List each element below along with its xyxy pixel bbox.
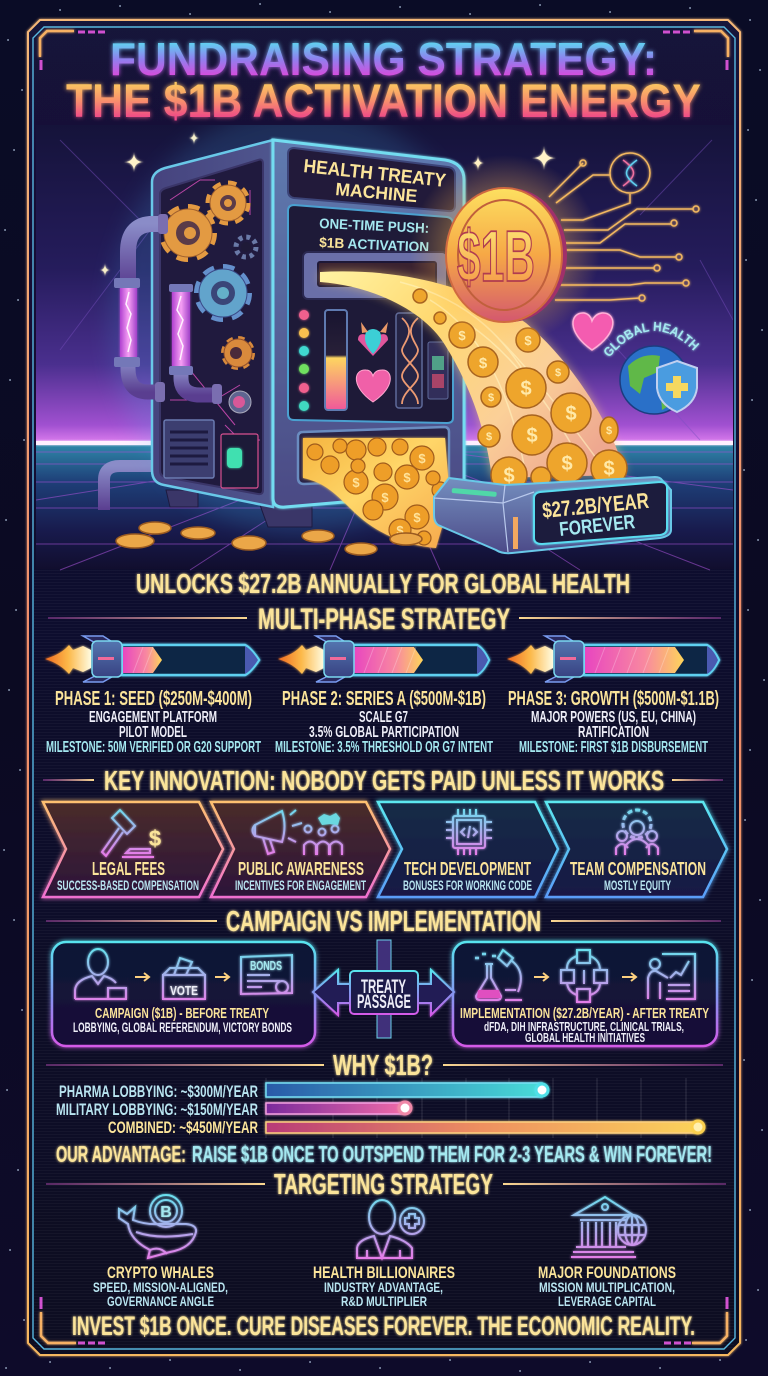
icon: network [561,950,607,1002]
slot [303,252,447,299]
big $1B coin: $1B [457,217,535,297]
phase 2 text: 3.5% GLOBAL PARTICIPATION [309,724,459,741]
title [66,33,701,127]
icon: institution with globe [571,1197,646,1257]
target: major foundations: LEVERAGE CAPITAL [558,1293,656,1309]
control panel [288,205,453,423]
phase 1 text: MILESTONE: 50M VERIFIED OR G20 SUPPORT [46,739,261,756]
header screen: MACHINE [335,179,418,206]
chevron: tech development: BONUSES FOR WORKING CODE [403,878,532,893]
coin dollar signs [458,328,615,487]
global health badge: GLOBAL HEALTH [602,320,701,358]
coin stream from slot [320,271,626,478]
phase 1 text: PHASE 1: SEED ($250M-$400M) [55,688,252,710]
target: major foundations: MAJOR FOUNDATIONS [538,1263,676,1282]
gear small blue [236,237,256,257]
icon: teal emblem [358,334,388,356]
small monitor [221,434,258,488]
section: multi-phase strategy [45,603,721,756]
panel: implementation [453,942,717,1046]
small meter panel [428,342,448,399]
icon: bonds certificate [241,955,292,994]
coin stream from chamber: $ [413,510,421,525]
arrow [215,973,229,981]
coin stream from chamber: $ [396,523,404,538]
lower scanline texture [34,570,734,1348]
collection bin [434,477,671,553]
target: crypto whales: SPEED, MISSION-ALIGNED, [93,1279,228,1295]
rocket 2 [278,636,489,682]
target: health billionaires: R&D MULTIPLIER [341,1293,427,1309]
phase 2 text [275,688,493,756]
phase 1 text: ENGAGEMENT PLATFORM [89,709,217,726]
sky background [36,125,733,444]
bar chart [56,1078,704,1138]
hero illustration [36,125,733,570]
chevron: tech development: TECH DEVELOPMENT [404,859,531,879]
machine [110,105,490,535]
bar: military: MILITARY LOBBYING: ~$150M/YEAR [56,1101,258,1119]
title: THE $1B ACTIVATION ENERGY [66,74,701,127]
status lights [299,310,309,411]
bar: combined [108,1119,704,1137]
icon: lab flask and microscope [475,950,522,1000]
phase 1 text [46,688,261,756]
gear big [163,208,213,258]
sparkles [100,131,556,277]
target: health billionaires: HEALTH BILLIONAIRES [313,1263,455,1282]
bin label: FOREVER [558,511,637,541]
icon: heart [356,370,390,402]
coin stream from chamber: $ [381,490,389,505]
coin dollar signs: $ [503,465,515,487]
circuit lines [549,153,699,301]
bar: combined: COMBINED: ~$450M/YEAR [108,1119,258,1137]
heading: CAMPAIGN VS IMPLEMENTATION [226,906,541,938]
chevron: legal fees: LEGAL FEES [92,859,165,879]
gear second [209,184,247,222]
chevron: team compensation: MOSTLY EQUITY [604,878,671,893]
treaty passage double arrow: TREATY [361,977,406,998]
falling coins [413,289,627,493]
rocket 3 [507,636,719,682]
header screen [288,148,455,211]
phase 3 text [508,688,719,756]
control panel: $1B ACTIVATION [319,234,429,255]
coin dollar signs: $ [488,392,494,404]
target: major foundations [538,1197,676,1309]
globe [620,346,688,414]
icon: bonds certificate: BONDS [250,959,282,973]
phase 3 text: RATIFICATION [578,724,649,741]
level gauge [325,310,347,410]
icon: vote box [163,958,205,999]
icon: presenter chart [648,954,695,999]
heading: MULTI-PHASE STRATEGY [258,603,510,636]
coin dollar signs: $ [565,403,577,425]
icon: code chip [446,809,492,855]
chevron: legal fees [43,802,223,897]
gear teal [198,268,248,318]
section: targeting strategy [46,1169,726,1309]
chevron: team compensation [546,802,727,897]
target: health billionaires [313,1200,455,1309]
coin dollar signs: $ [561,453,573,475]
vent [164,420,214,478]
phase 2 text: SCALE G7 [359,709,408,726]
target: crypto whales [93,1195,228,1309]
icon: vote box: VOTE [170,984,198,998]
bin label: $27.2B/YEAR [541,488,650,523]
coin dollar signs: $ [486,431,492,443]
machine front [273,140,464,507]
target: crypto whales: GOVERNANCE ANGLE [107,1293,214,1309]
shield [657,361,697,412]
coin stream from chamber: $ [418,451,426,466]
machine side [152,140,273,507]
icon: politician [75,949,126,999]
scene decorative lines [60,140,733,440]
coin stream from chamber: $ [403,470,411,485]
treaty passage double arrow [313,970,454,1015]
target: major foundations: MISSION MULTIPLICATION, [539,1279,675,1295]
chevron: tech development [378,802,558,897]
bar: pharma: PHARMA LOBBYING: ~$300M/YEAR [59,1083,258,1101]
heading: WHY $1B? [333,1050,433,1082]
target: crypto whales: CRYPTO WHALES [107,1263,214,1282]
section: key innovation [43,765,727,897]
icon: megaphone and crowd [252,810,342,855]
treaty passage double arrow: PASSAGE [357,992,411,1013]
icon: team gear [616,810,658,855]
icon: gavel [102,810,161,857]
coin dollar signs: $ [524,333,532,348]
arrow [622,973,636,981]
panel: campaign [52,942,315,1046]
output chamber [298,427,449,484]
bar: pharma [59,1083,548,1101]
big $1B coin [414,159,596,334]
panel: campaign: LOBBYING, GLOBAL REFERENDUM, VICTORY BONDS [73,1020,292,1035]
knob [229,391,251,413]
control panel: ONE-TIME PUSH: [319,215,429,236]
title: FUNDRAISING STRATEGY: [110,33,657,85]
icon: executive with medical cross [357,1200,424,1258]
heading: TARGETING STRATEGY [274,1169,493,1201]
coin dollar signs: $ [555,367,561,379]
glowing tubes and pipes [114,214,222,404]
chevron: team compensation: TEAM COMPENSATION [570,859,706,879]
chevron: public awareness [211,802,390,897]
section: why $1B [46,1050,723,1167]
icon: heart [573,313,613,350]
rocket 1 [45,636,259,682]
coin stream from chamber [303,438,450,548]
icon: dna strip [396,313,422,408]
icon: dna circle [610,153,650,193]
coin stream from chamber: $ [352,475,360,490]
coin dollar signs: $ [479,355,488,372]
machine feet [166,490,312,527]
icon: gavel: $ [149,826,161,851]
phase 2 text: PHASE 2: SERIES A ($500M-$1B) [282,688,486,710]
coin dollar signs: $ [520,378,532,400]
icon: whale with bitcoin: B [160,1204,172,1221]
chevron: public awareness: INCENTIVES FOR ENGAGEMENT [235,878,366,893]
gears [163,184,256,367]
global health badge [602,320,701,415]
divider beam [377,940,391,1038]
phase 1 text: PILOT MODEL [119,724,187,741]
panel: campaign: CAMPAIGN ($1B) - BEFORE TREATY [95,1005,269,1022]
panel: implementation: GLOBAL HEALTH INITIATIVES [525,1030,645,1045]
coin dollar signs: $ [526,425,538,447]
coin dollar signs: $ [603,458,615,480]
chevron: public awareness: PUBLIC AWARENESS [238,859,364,879]
floor grid [36,441,733,570]
target: health billionaires: INDUSTRY ADVANTAGE, [324,1279,443,1295]
floor coins [116,522,422,555]
arrow [534,973,548,981]
gear small orange [224,339,252,367]
advantage statement: OUR ADVANTAGE: [56,1141,186,1167]
arrow [135,973,149,981]
bin label [534,482,667,544]
header screen: HEALTH TREATY [302,156,447,192]
phase 2 text: MILESTONE: 3.5% THRESHOLD OR G7 INTENT [275,739,493,756]
icon: lower-left pipe [104,466,152,510]
section: campaign vs implementation [46,906,721,1046]
coin dollar signs: $ [458,328,466,343]
coin dollar signs: $ [606,425,612,437]
chevron: legal fees: SUCCESS-BASED COMPENSATION [57,878,199,893]
